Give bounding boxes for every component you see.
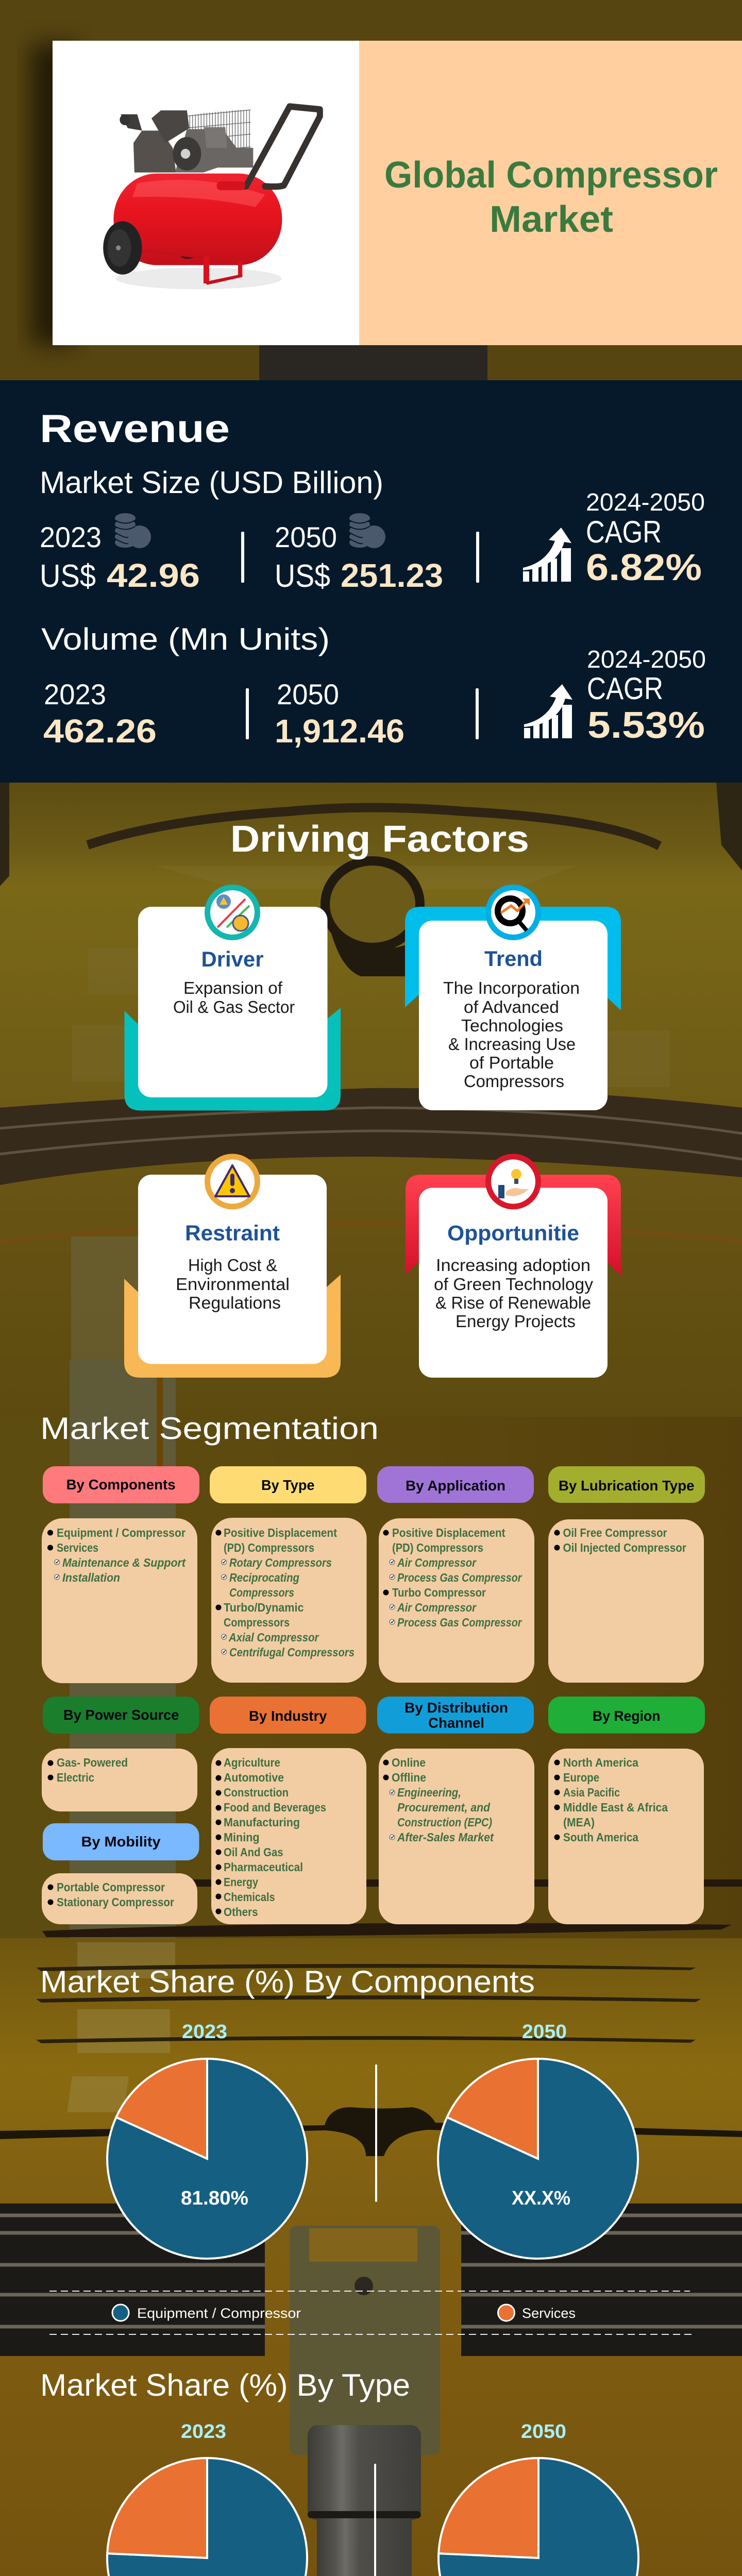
list bbox=[211, 1518, 367, 1683]
title: Market bbox=[490, 199, 613, 240]
icon: driver bbox=[205, 885, 260, 940]
card: Trend bbox=[405, 885, 621, 1110]
stat: market size 2023: 42.96 bbox=[107, 557, 200, 594]
card: Driver bbox=[125, 885, 341, 1111]
list: Positive Displacement bbox=[392, 1526, 505, 1539]
segment: By Components bbox=[42, 1466, 199, 1683]
stat: market size 2023 bbox=[40, 513, 200, 594]
stat: volume 2050: 1,912.46 bbox=[275, 713, 404, 750]
label: Restraint bbox=[185, 1221, 280, 1245]
title: Global Compressor bbox=[384, 155, 718, 196]
list: Air Compressor bbox=[397, 1601, 477, 1614]
segment: By Application bbox=[377, 1466, 534, 1683]
list: Engineering, bbox=[397, 1786, 461, 1799]
divider bbox=[374, 2464, 376, 2576]
list: Online bbox=[392, 1756, 426, 1769]
segment: By Region bbox=[548, 1697, 705, 1924]
list bbox=[211, 1748, 366, 1924]
segment: By Industry: By Industry bbox=[249, 1708, 327, 1724]
segment: By Application: By Application bbox=[406, 1478, 505, 1494]
segment: By Mobility bbox=[42, 1823, 199, 1924]
pie chart: components 2050: XX.X% bbox=[512, 2188, 570, 2209]
pie chart: type 2023: 2023 bbox=[181, 2421, 226, 2443]
pie chart: components 2050 bbox=[438, 2021, 638, 2259]
stat: market size 2050 bbox=[275, 513, 443, 594]
segment: By Type: By Type bbox=[261, 1477, 314, 1493]
stat: market size CAGR: 2024-2050 bbox=[586, 489, 705, 516]
stat: volume 2050: 2050 bbox=[277, 678, 339, 710]
stat: market size CAGR bbox=[586, 489, 705, 588]
heading: Market Share By Components: Market Share (%) By Components bbox=[40, 1964, 535, 1999]
description bbox=[434, 1256, 593, 1331]
description: of Portable bbox=[469, 1053, 554, 1072]
list: Mining bbox=[224, 1831, 260, 1844]
pie chart: components 2023 bbox=[107, 2021, 307, 2259]
list: Compressors bbox=[224, 1616, 290, 1629]
stat: volume CAGR bbox=[587, 646, 706, 746]
list: Construction bbox=[224, 1786, 289, 1799]
list: Positive Displacement bbox=[224, 1526, 337, 1539]
list: Rotary Compressors bbox=[229, 1556, 332, 1569]
pie chart: type 2050 bbox=[439, 2421, 638, 2576]
icon: opportunity bbox=[485, 1154, 541, 1210]
list: Centrifugal Compressors bbox=[229, 1646, 355, 1659]
pie chart: components 2023: 81.80% bbox=[181, 2188, 248, 2209]
list: South America bbox=[563, 1831, 638, 1844]
list: Electric bbox=[57, 1771, 94, 1784]
segment: By Region: By Region bbox=[593, 1708, 661, 1724]
pie chart: components 2050: 2050 bbox=[522, 2021, 567, 2043]
description: of Advanced bbox=[464, 997, 559, 1016]
icon: warning bbox=[205, 1154, 260, 1210]
list: Turbo Compressor bbox=[392, 1586, 486, 1599]
list: Automotive bbox=[224, 1771, 284, 1784]
stat: volume CAGR: 5.53% bbox=[587, 705, 705, 746]
description: Increasing adoption bbox=[436, 1256, 591, 1275]
list: Asia Pacific bbox=[563, 1786, 620, 1799]
legend: components bbox=[49, 2291, 695, 2334]
segment: By Distribution Channel bbox=[377, 1697, 534, 1924]
description: Regulations bbox=[189, 1293, 281, 1312]
segment: By Industry bbox=[210, 1697, 366, 1924]
list: Food and Beverages bbox=[224, 1801, 326, 1814]
card: Restraint bbox=[124, 1154, 341, 1378]
label: Trend bbox=[484, 946, 543, 971]
list: (PD) Compressors bbox=[224, 1541, 314, 1554]
stat: market size 2050: US$ bbox=[275, 558, 330, 594]
divider bbox=[476, 688, 479, 739]
list: Air Compressor bbox=[397, 1556, 477, 1569]
list bbox=[548, 1519, 704, 1683]
heading: Market Share By Type: Market Share (%) By Type bbox=[40, 2368, 410, 2402]
list: Energy bbox=[224, 1875, 258, 1889]
divider bbox=[246, 688, 249, 739]
list: Axial Compressor bbox=[228, 1631, 319, 1644]
compressor illustration bbox=[103, 107, 320, 290]
description: Environmental bbox=[176, 1275, 290, 1294]
list: Turbo/Dynamic bbox=[224, 1601, 304, 1614]
list: North America bbox=[563, 1756, 638, 1769]
list: Installation bbox=[62, 1571, 120, 1584]
stat: volume CAGR: 2024-2050 bbox=[587, 646, 706, 673]
label: Driver bbox=[201, 947, 264, 971]
segment: By Power Source: By Power Source bbox=[63, 1707, 179, 1723]
list: Europe bbox=[563, 1771, 599, 1784]
list bbox=[379, 1518, 534, 1683]
stat: market size 2050: 2050 bbox=[275, 521, 337, 553]
description: High Cost & bbox=[188, 1256, 277, 1275]
list: Stationary Compressor bbox=[57, 1895, 174, 1909]
description: Oil & Gas Sector bbox=[173, 997, 295, 1016]
list: Maintenance & Support bbox=[62, 1556, 186, 1569]
stat: market size 2023: 2023 bbox=[40, 521, 102, 553]
segment: By Components: By Components bbox=[66, 1477, 176, 1493]
description bbox=[176, 1256, 290, 1312]
heading: Revenue: Revenue bbox=[40, 407, 230, 451]
stat: volume 2023: 2023 bbox=[44, 678, 106, 710]
description bbox=[173, 978, 295, 1016]
description: Compressors bbox=[464, 1072, 564, 1091]
list: Construction (EPC) bbox=[397, 1816, 492, 1829]
card: Opportunitie bbox=[406, 1154, 621, 1378]
description: Expansion of bbox=[183, 978, 283, 997]
header banner bbox=[31, 41, 742, 345]
icon: trend bbox=[485, 885, 541, 940]
heading: Driving Factors: Driving Factors bbox=[230, 819, 529, 860]
list: After-Sales Market bbox=[397, 1831, 494, 1844]
list: Manufacturing bbox=[224, 1816, 300, 1829]
list: Others bbox=[224, 1905, 258, 1919]
segment: By Type bbox=[210, 1466, 367, 1683]
stat: volume 2050 bbox=[275, 678, 404, 750]
list bbox=[548, 1749, 704, 1924]
list: Gas- Powered bbox=[57, 1756, 128, 1769]
list: Services bbox=[57, 1541, 98, 1554]
list bbox=[42, 1873, 197, 1924]
list: Oil Injected Compressor bbox=[563, 1541, 686, 1554]
list: Procurement, and bbox=[397, 1801, 491, 1814]
divider bbox=[476, 532, 479, 583]
segment: By Distribution Channel: Channel bbox=[428, 1715, 484, 1731]
segment: By Lubrication Type bbox=[548, 1466, 705, 1683]
list: Process Gas Compressor bbox=[397, 1616, 522, 1629]
stat: volume 2023: 462.26 bbox=[43, 713, 157, 750]
stat: volume 2023 bbox=[43, 678, 157, 750]
list: (PD) Compressors bbox=[392, 1541, 483, 1554]
stat: market size 2050: 251.23 bbox=[341, 557, 443, 594]
list: Middle East & Africa bbox=[563, 1801, 668, 1814]
list: Offline bbox=[392, 1771, 426, 1784]
list bbox=[379, 1749, 534, 1924]
description: of Green Technology bbox=[434, 1275, 593, 1294]
pie chart: type 2050: 2050 bbox=[521, 2421, 566, 2443]
revenue panel bbox=[0, 380, 742, 783]
description bbox=[443, 978, 580, 1091]
list: Equipment / Compressor bbox=[57, 1526, 185, 1539]
stat: market size CAGR: 6.82% bbox=[586, 547, 702, 588]
segment: By Power Source bbox=[42, 1697, 199, 1811]
list bbox=[42, 1518, 197, 1683]
description: The Incorporation bbox=[443, 978, 580, 997]
divider bbox=[375, 2064, 377, 2202]
list: Reciprocating bbox=[229, 1571, 299, 1584]
pie chart: components 2023: 2023 bbox=[182, 2021, 227, 2043]
description: & Rise of Renewable bbox=[435, 1293, 591, 1312]
list: Chemicals bbox=[224, 1890, 275, 1904]
list: Process Gas Compressor bbox=[397, 1571, 522, 1584]
list: Oil And Gas bbox=[224, 1845, 283, 1859]
stat: volume CAGR: CAGR bbox=[587, 671, 663, 706]
list: Agriculture bbox=[224, 1756, 280, 1769]
stat: market size CAGR: CAGR bbox=[586, 515, 662, 549]
subheading: volume: Volume (Mn Units) bbox=[41, 622, 330, 656]
divider bbox=[241, 532, 244, 583]
pie chart: type 2023 bbox=[107, 2421, 307, 2576]
list: (MEA) bbox=[563, 1816, 595, 1829]
legend: components: Equipment / Compressor bbox=[137, 2306, 301, 2321]
list: Portable Compressor bbox=[57, 1880, 165, 1894]
description: & Increasing Use bbox=[448, 1035, 576, 1054]
list: Oil Free Compressor bbox=[563, 1526, 667, 1539]
segment: By Distribution Channel: By Distribution bbox=[404, 1700, 508, 1716]
icon: growth arrow bbox=[523, 528, 571, 582]
list: Compressors bbox=[229, 1586, 294, 1599]
icon: growth arrow bbox=[524, 684, 572, 738]
segment: By Mobility: By Mobility bbox=[81, 1834, 161, 1850]
list bbox=[42, 1749, 197, 1811]
title bbox=[384, 155, 718, 240]
subheading: market size: Market Size (USD Billion) bbox=[40, 465, 383, 500]
description: Technologies bbox=[461, 1016, 563, 1035]
label: Opportunitie bbox=[447, 1221, 579, 1245]
heading: Market Segmentation: Market Segmentation bbox=[40, 1411, 379, 1446]
segment: By Lubrication Type: By Lubrication Type bbox=[559, 1478, 695, 1494]
list: Pharmaceutical bbox=[224, 1860, 303, 1874]
description: Energy Projects bbox=[456, 1312, 576, 1331]
stat: market size 2023: US$ bbox=[40, 558, 96, 594]
legend: components: Services bbox=[522, 2306, 576, 2321]
